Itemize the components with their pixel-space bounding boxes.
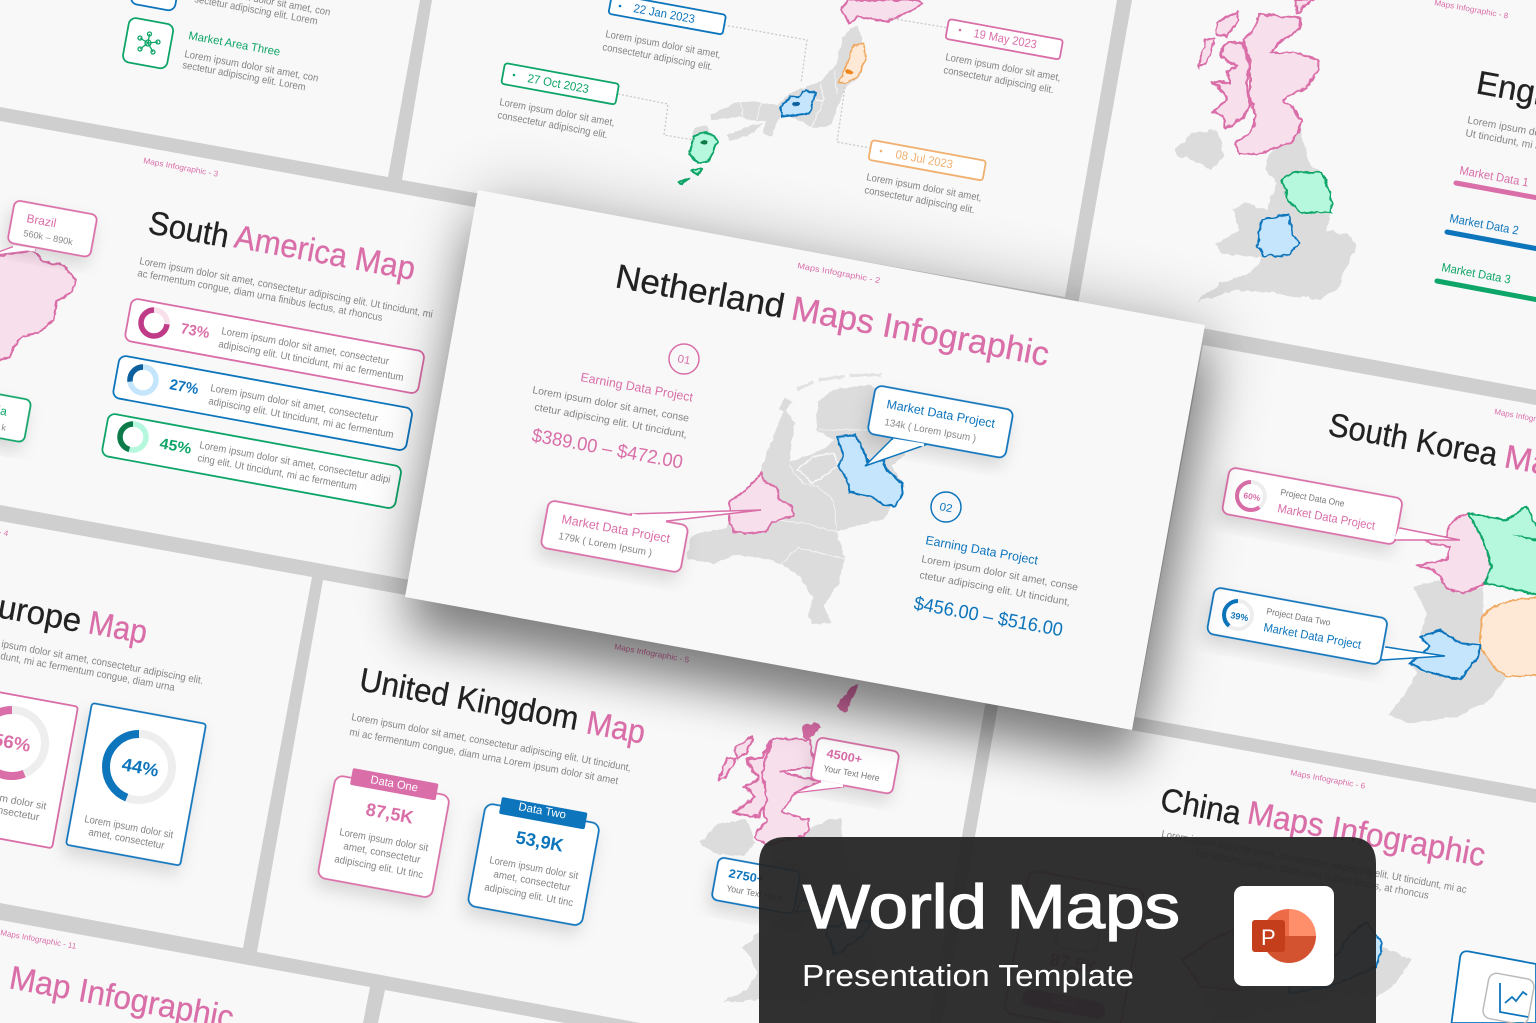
date label: 22 Jan 2023: Lorem ipsum dolor sit amet, xyxy=(604,29,722,61)
map: china regions xyxy=(1182,922,1412,1022)
date label: 19 May 2023 xyxy=(942,19,1063,96)
page label: Maps Infographic - 2 xyxy=(797,261,881,285)
slide: netherland maps infographic (featured) xyxy=(405,190,1205,730)
icon card: growth chart xyxy=(1452,951,1536,1023)
page label: Maps Infographic - 3 xyxy=(143,156,220,179)
stat row: 27%: Lorem ipsum dolor sit amet, consectetur xyxy=(209,383,379,425)
callout: market data project blue xyxy=(865,385,1014,466)
stat row: 27%: adipiscing elit. Ut tincidunt, mi ac fermentum xyxy=(207,396,394,441)
date label: 08 Jul 2023: Lorem ipsum dolor sit amet, xyxy=(865,172,983,204)
title: United Kingdom xyxy=(357,660,582,737)
card: data two: Lorem ipsum dolor sit xyxy=(488,855,579,882)
page label: Maps Infographic - 6 xyxy=(1290,768,1367,791)
date label: 27 Oct 2023: Lorem ipsum dolor sit amet, xyxy=(498,97,616,129)
date label: 27 Oct 2023: 27 Oct 2023 xyxy=(526,71,590,96)
card: data one: amet, consectetur xyxy=(342,841,422,866)
callout: project data one xyxy=(1222,467,1460,545)
callout: 2750+: Your Text Here xyxy=(726,883,784,903)
callout: project data one: Market Data Project xyxy=(1276,501,1377,533)
text block: earning data project one xyxy=(530,370,695,474)
intro text: dunt, mi ac fermentum congue, diam urna xyxy=(0,651,176,694)
date label: 22 Jan 2023: 22 Jan 2023 xyxy=(632,1,696,26)
date label: 08 Jul 2023 xyxy=(863,140,986,216)
data card: 87,5K under panel xyxy=(1004,870,1145,1023)
title: Map xyxy=(86,603,150,651)
card: data two: Data Two xyxy=(517,801,567,822)
callout: brazil: 560k – 890k xyxy=(23,228,74,247)
text block: earning data project two: Lorem ipsum dolor sit amet, conse xyxy=(920,554,1079,594)
market data bars xyxy=(1437,163,1536,304)
text block: earning data project two: $456.00 – $516.00 xyxy=(912,593,1064,641)
intro text: mi ac fermentum congue, diam urna Lorem ipsum dolor sit amet xyxy=(348,727,619,787)
text: market area three: sectetur adipiscing elit. Lorem xyxy=(181,60,306,94)
callout: 4500+ xyxy=(794,737,900,794)
date label: 22 Jan 2023 xyxy=(601,0,726,73)
title: America Map xyxy=(232,217,418,287)
badge: 02 xyxy=(931,492,961,522)
title xyxy=(146,203,418,287)
slide: united kingdom map xyxy=(257,580,986,1023)
slide: china map xyxy=(942,706,1536,1023)
stat row: 27% xyxy=(112,355,413,451)
donut: 60%: 60% xyxy=(1243,490,1262,503)
donut: 60% xyxy=(1237,482,1265,510)
stat row: 73%: Lorem ipsum dolor sit amet, consectetur xyxy=(220,326,390,368)
callout: green country fragment: k xyxy=(1,422,7,433)
bottom drop shadow of featured slide xyxy=(405,226,1205,766)
market data bars: Market Data 1 xyxy=(1458,163,1530,190)
callout: 2750+: 2750+ xyxy=(727,866,765,886)
card: data two: amet, consectetur xyxy=(492,869,572,894)
title: Netherland xyxy=(613,257,788,326)
title xyxy=(0,583,150,651)
card: data two xyxy=(467,797,600,926)
date label: 22 Jan 2023: consectetur adipiscing elit. xyxy=(601,42,714,73)
intro text: ipsum dolor sit amet, consectetur adipiscing elit. xyxy=(0,639,204,687)
callout: 2750+ xyxy=(711,857,830,914)
stat row: 73%: adipiscing elit. Ut tincidunt, mi ac fermentum xyxy=(217,339,404,384)
data card: 87,5K under panel: 87,5K xyxy=(1048,949,1099,978)
card: 44%: amet, consectetur xyxy=(87,827,166,852)
intro text: Lorem ipsum dolor sit amet, consectetur adipiscing elit. Ut tincidunt, xyxy=(350,712,632,774)
text: market area three: Lorem ipsum dolor sit amet, con xyxy=(183,49,319,85)
map: japan xyxy=(679,0,923,184)
wide ambient shadow of featured slide xyxy=(413,194,1213,734)
callout: 4500+: 4500+ xyxy=(825,746,863,766)
text block: earning data project one: Earning Data Project xyxy=(579,370,695,405)
date label: 19 May 2023: Lorem ipsum dolor sit amet, xyxy=(944,52,1062,84)
callout: project data two xyxy=(1207,587,1445,665)
slide: market areas (top left) xyxy=(0,0,420,177)
intro text: Lorem ipsum dolor sit amet, consectetur adipiscing elit. Ut tincidunt, mi xyxy=(138,256,434,321)
stat row: 45%: Lorem ipsum dolor sit amet, consectetur adipi xyxy=(198,440,391,486)
callout: brazil: Brazil xyxy=(25,211,57,230)
date label: 27 Oct 2023 xyxy=(496,63,619,141)
title xyxy=(1158,780,1488,873)
intro text: ac fermentum congue, diam urna finibus lectus, at rhoncus xyxy=(136,268,383,324)
date label: 27 Oct 2023: consectetur adipiscing elit. xyxy=(496,110,609,141)
market data bars: Market Data 3 xyxy=(1440,260,1512,287)
callout: market data project pink: Market Data Project xyxy=(560,512,672,546)
card: 44%: 44% xyxy=(120,754,160,781)
page label: Maps Infographic - 5 xyxy=(614,642,691,665)
market data bars: Market Data 2 xyxy=(1448,211,1520,238)
slide: europe map xyxy=(0,516,312,948)
callout: project data two: Market Data Project xyxy=(1262,620,1363,652)
card: data one: adipiscing elit. Ut tinc xyxy=(333,854,424,881)
text block: earning data project two xyxy=(912,533,1079,641)
slide: bottom centre fragment xyxy=(378,990,565,1023)
card: 56% xyxy=(0,685,78,848)
callout: market data project blue: 134k ( Lorem Ipsum ) xyxy=(883,417,977,445)
text block: earning data project one: ctetur adipiscing elit. Ut tincidunt, xyxy=(533,402,688,441)
text block: earning data project one: $389.00 – $472.00 xyxy=(530,425,684,474)
title panel xyxy=(759,837,1376,1023)
icon: green network box xyxy=(122,17,174,69)
card: data two: 53,9K xyxy=(514,827,565,856)
donut: 39% xyxy=(1224,601,1252,629)
callout: green country fragment xyxy=(0,384,32,443)
text: market area three xyxy=(181,30,319,94)
callout: project data two: Project Data Two xyxy=(1266,606,1331,628)
title: Maps Infographic xyxy=(789,289,1052,374)
badge: 01: 01 xyxy=(676,353,691,367)
data card: 87,5K under panel: 2022 xyxy=(1051,993,1078,1009)
title: South xyxy=(146,203,232,255)
date label: 08 Jul 2023: 08 Jul 2023 xyxy=(894,147,954,171)
blue icon box fragment xyxy=(130,0,182,11)
title: Maps Infographic xyxy=(1245,793,1488,873)
donut: 39%: 39% xyxy=(1230,610,1249,623)
stat row: 45%: cing elit. Ut tincidunt, mi ac fermentum xyxy=(196,453,358,493)
map: south korea regions xyxy=(1388,507,1536,723)
stat row: 45%: 45% xyxy=(158,435,193,458)
map: great britain regions xyxy=(1175,0,1357,302)
badge: 01 xyxy=(669,344,699,374)
callout: market data project blue: Market Data Project xyxy=(885,397,997,431)
map: netherlands xyxy=(687,375,905,624)
slide: south america map xyxy=(0,121,480,580)
text block: earning data project two: ctetur adipiscing elit. Ut tincidunt, xyxy=(918,570,1071,609)
stat row: 73%: 73% xyxy=(179,320,211,342)
map: united kingdom xyxy=(699,685,877,1003)
date label: 08 Jul 2023: consectetur adipiscing elit. xyxy=(863,185,976,216)
intro text: fermentum congue, diam urna finibus lectus, at rhoncus xyxy=(1194,848,1430,902)
badge: 02: 02 xyxy=(938,501,953,515)
map: brazil xyxy=(0,250,76,363)
slide: england map xyxy=(1078,0,1536,390)
slide: bottom left map infographic xyxy=(0,920,370,1023)
card: 44%: Lorem ipsum dolor sit xyxy=(83,814,174,841)
slide: south korea map xyxy=(1135,345,1536,789)
text: market area three: Market Area Three xyxy=(187,30,281,59)
slide: japan timeline xyxy=(402,0,1117,297)
title: South Korea xyxy=(1326,405,1501,473)
card: data one: Lorem ipsum dolor sit xyxy=(338,827,429,854)
callout: market data project pink: 179k ( Lorem Ipsum ) xyxy=(557,531,653,559)
text block: earning data project two: Earning Data Project xyxy=(924,533,1040,568)
heading: world maps: World Maps xyxy=(803,873,1180,942)
subheading: presentation template: Presentation Template xyxy=(802,958,1134,993)
callout: market data project pink xyxy=(540,500,761,573)
date label: 19 May 2023: 19 May 2023 xyxy=(972,26,1038,52)
stat row: 27%: 27% xyxy=(168,376,200,398)
page label: Maps Infographic - 11 xyxy=(0,928,78,951)
callout: 4500+: Your Text Here xyxy=(823,763,881,783)
stat row: 45% xyxy=(101,413,402,509)
text block: earning data project one: Lorem ipsum dolor sit amet, conse xyxy=(531,385,690,425)
callout: project data one: Project Data One xyxy=(1280,487,1345,509)
title: Map xyxy=(584,703,648,751)
card: data one: Data One xyxy=(369,774,419,795)
title: China xyxy=(1158,780,1245,832)
card: data one xyxy=(317,768,450,898)
icon: powerpoint xyxy=(1234,886,1334,986)
card: data two: adipiscing elit. Ut tinc xyxy=(483,882,574,909)
title xyxy=(613,257,1052,374)
date label: 19 May 2023: consectetur adipiscing elit. xyxy=(942,65,1055,96)
callout: brazil xyxy=(0,200,98,257)
card: data one: 87,5K xyxy=(364,799,415,828)
card: 44% xyxy=(66,703,206,866)
intro text: Lorem ipsum dolor sit amet, consectetur adipiscing elit. Ut tincidunt, mi ac xyxy=(1160,829,1467,896)
connectors xyxy=(618,18,949,148)
stat row: 73% xyxy=(124,298,425,394)
icon: powerpoint: P xyxy=(1261,925,1276,950)
